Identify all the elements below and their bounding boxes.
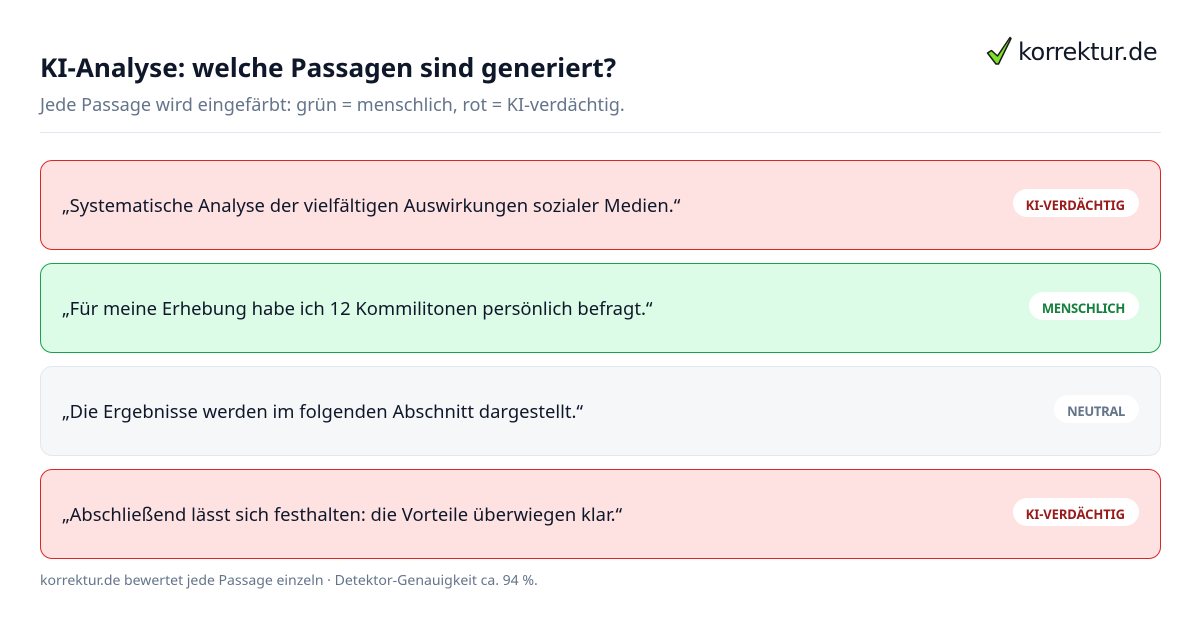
header divider — [40, 132, 1161, 133]
footer note: korrektur.de bewertet jede Passage einzeln · Detektor-Genauigkeit ca. 94 %. — [40, 571, 538, 590]
panel: passage 3, neutral — [40, 366, 1161, 456]
logo wordmark: korrektur.de — [1018, 38, 1157, 66]
badge: KI-verdächtig — [1013, 189, 1139, 217]
badge: KI-verdächtig: KI-VERDÄCHTIG — [1026, 505, 1125, 523]
icon: green check mark — [986, 36, 1012, 65]
badge: neutral — [1054, 395, 1139, 423]
title: KI-Analyse: welche Passagen sind generiert? — [40, 49, 616, 85]
passage text: „Die Ergebnisse werden im folgenden Abschnitt dargestellt.“ — [62, 399, 583, 424]
logo: korrektur.de — [986, 36, 1157, 66]
passage text: „Für meine Erhebung habe ich 12 Kommilitonen persönlich befragt.“ — [62, 296, 653, 321]
panel: passage 2, human — [40, 263, 1161, 353]
subtitle: Jede Passage wird eingefärbt: grün = menschlich, rot = KI-verdächtig. — [40, 93, 625, 117]
passage text: „Abschließend lässt sich festhalten: die Vorteile überwiegen klar.“ — [62, 502, 622, 527]
passage text: „Systematische Analyse der vielfältigen Auswirkungen sozialer Medien.“ — [62, 193, 680, 218]
badge: menschlich — [1029, 292, 1139, 320]
badge: KI-verdächtig — [1013, 498, 1139, 526]
badge: KI-verdächtig: KI-VERDÄCHTIG — [1026, 196, 1125, 214]
badge: menschlich: MENSCHLICH — [1042, 299, 1125, 317]
panel: passage 1, AI-suspect — [40, 160, 1161, 250]
panel: passage 4, AI-suspect — [40, 469, 1161, 559]
badge: neutral: NEUTRAL — [1067, 402, 1125, 420]
